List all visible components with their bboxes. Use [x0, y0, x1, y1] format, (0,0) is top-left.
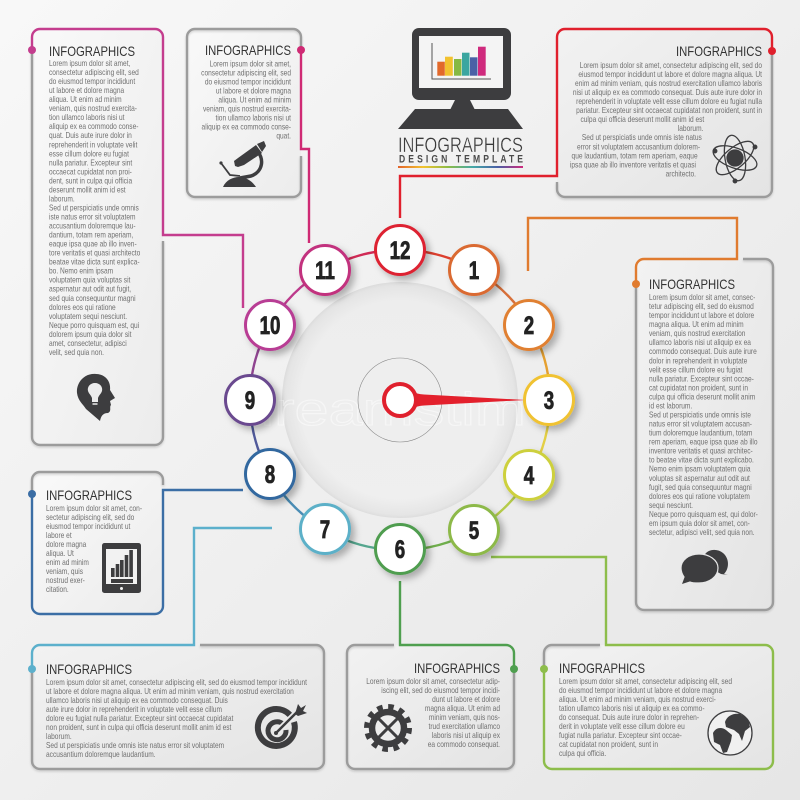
marker dot: [297, 46, 305, 54]
node 10: [246, 300, 294, 350]
text block: culpa qui officia.: [559, 748, 606, 758]
text block: ullamco laboris nisi ut aliquip ex ea commodo consequat. Duis: [46, 695, 228, 705]
text block: aute irure dolor in reprehenderit in voluptate velit esse cillum: [46, 704, 222, 714]
text block: enim ad minim: [46, 557, 89, 567]
node 7: [300, 504, 350, 554]
text block: id est laborum.: [649, 401, 692, 411]
text block: em ipsum quia dolor sit amet, con-: [649, 518, 750, 528]
text block: dolore magna: [46, 539, 87, 549]
text block: aspernatur aut odit aut fugit,: [49, 284, 131, 294]
node 8: 8: [265, 460, 275, 489]
heading: INFOGRAPHICS: [49, 43, 135, 59]
node 1: 1: [469, 256, 479, 285]
text block: aliqua. Ut enim ad minim veniam, quis nostrud exerci-: [559, 694, 716, 704]
heading: INFOGRAPHICS: [559, 660, 645, 676]
chart bars: [437, 47, 486, 76]
title: INFOGRAPHICS: [398, 134, 523, 157]
heading: INFOGRAPHICS: [46, 487, 132, 503]
text block: aliqua. Ut enim ad minim: [49, 94, 122, 104]
watermark: dreamstime: [240, 383, 560, 435]
text block: tium doloremque laudantium, totam: [649, 428, 752, 438]
text block: do eiusmod tempor incididunt: [205, 77, 291, 87]
icon: tablet with bars: [102, 543, 141, 593]
text block: dolore eu fugiat nulla pariatur. Excepteur sint occaecat cupidatat: [46, 713, 233, 723]
text block: ea commodo consequat.: [428, 739, 500, 749]
text block: cat cupidatat non proident, sunt in: [559, 739, 658, 749]
text block: laborum.: [46, 731, 72, 741]
text block: do eiusmod tempor incididunt ut labore et dolore magna: [559, 685, 723, 695]
text block: quat. Duis aute irure dolor in: [49, 131, 132, 140]
panel: left middle (blue): [28, 472, 243, 614]
text block: veniam, quis nostrud exercita-: [49, 104, 137, 113]
text block: fugit, sed quia consequuntur magni: [649, 482, 752, 492]
connector: orange line to circle 2: [528, 218, 737, 284]
text block: to beatae vitae dicta sunt explicabo.: [649, 455, 754, 465]
text block: que laudantium, totam rem aperiam, eaque: [572, 151, 698, 160]
text block: veniam, quis: [46, 566, 83, 576]
text block: tion ullamco laboris nisi ut: [215, 113, 291, 123]
text block: eiusmod tempor incididunt ut labore et dolore magna aliqua. Ut: [578, 69, 762, 79]
icon: microscope: [219, 141, 266, 187]
text block: inventore veritatis et quasi architec-: [649, 446, 753, 456]
node 9: [226, 376, 274, 424]
text block: sequi nesciunt.: [649, 500, 693, 510]
text block: commodo consequat. Duis aute irure: [649, 347, 757, 356]
marker dot: [768, 47, 776, 55]
icon: target with arrow: [258, 704, 307, 746]
text block: iste natus error sit voluptatem: [49, 212, 136, 222]
text block: beatae vitae dicta sunt explica-: [49, 257, 140, 267]
text block: dent, sunt in culpa qui officia: [49, 176, 133, 186]
node 12: 12: [390, 236, 410, 265]
text block: fugiat nulla pariatur. Excepteur sint occae-: [559, 730, 682, 740]
text block: do eiusmod tempor incididunt: [49, 76, 135, 86]
pointer: [412, 391, 526, 409]
node 10: 10: [260, 311, 280, 340]
text block: ut labore et dolore magna: [49, 85, 125, 95]
text block: veniam, quis nostrud exercitation: [649, 329, 745, 338]
icon: computer monitor with bar chart: [398, 28, 523, 129]
panel: bottom right (lime): [491, 557, 773, 769]
marker dot: [632, 280, 640, 288]
text block: Sed ut perspiciatis unde omnis: [49, 203, 139, 213]
panel: right (orange): [528, 218, 773, 610]
node 6: 6: [395, 535, 405, 564]
text block: laboris nisi ut aliquip ex: [432, 730, 500, 740]
clock dial: [226, 226, 574, 574]
text block: magna aliqua. Ut enim ad minim: [649, 319, 744, 329]
heading: INFOGRAPHICS: [414, 660, 500, 676]
heading: INFOGRAPHICS: [649, 276, 735, 292]
marker dot: [510, 665, 518, 673]
node 9: 9: [245, 386, 255, 415]
text block: ut labore et dolore magna: [216, 86, 292, 96]
text block: esse cillum dolore eu fugiat: [49, 149, 129, 158]
node 5: [450, 506, 498, 554]
text block: culpa qui officia deserunt mollit anim: [649, 392, 755, 402]
text block: do consequat. Duis aute irure dolor in reprehen-: [559, 712, 700, 722]
text block: amet, consectetur, adipisci: [49, 338, 127, 348]
text block: cat cupidatat non proident, sunt in: [649, 383, 748, 393]
text block: reprehenderit in voluptate velit esse cillum dolore eu fugiat nulla: [576, 96, 763, 106]
chart axes: [432, 43, 491, 79]
node 2: [504, 300, 554, 350]
text block: voluptas sit aspernatur aut odit aut: [649, 473, 750, 483]
text block: dantium, totam rem aperiam,: [49, 230, 133, 240]
text block: Neque porro quisquam est, qui dolor-: [649, 509, 758, 519]
panel: bottom left (light blue): [28, 528, 324, 769]
hub: [384, 384, 416, 416]
text block: nostrud exer-: [46, 575, 85, 585]
text block: natus error sit voluptatem accusan-: [649, 419, 753, 429]
ring connectors: [250, 250, 550, 550]
text block: iscing elit, sed do eiusmod tempor incidi-: [381, 685, 501, 695]
text block: magna aliqua. Ut enim ad: [425, 703, 500, 713]
text block: Lorem ipsum dolor sit amet,: [210, 59, 291, 69]
text block: voluptatem sequi nesciunt.: [49, 311, 127, 321]
text block: quat.: [276, 131, 291, 141]
text block: aliqua. Ut enim ad minim: [218, 95, 291, 105]
center disc: [282, 282, 518, 518]
connector: green line to circle 6: [400, 581, 514, 669]
text block: labore et: [46, 530, 72, 540]
text block: deserunt mollit anim id est: [49, 185, 126, 195]
node 11: [300, 246, 350, 294]
subtitle: DESIGN TEMPLATE: [399, 154, 523, 166]
text block: culpa qui officia deserunt mollit anim id est: [580, 115, 704, 124]
icon: head with light bulb: [77, 374, 115, 421]
text block: occaecat cupidatat non proi-: [49, 167, 132, 177]
text block: reprehenderit in voluptate velit: [49, 140, 137, 149]
text block: tempor incididunt ut labore et dolore: [649, 310, 754, 320]
node 6: [376, 524, 424, 574]
text block: Lorem ipsum dolor sit amet, con-: [46, 503, 143, 513]
text block: dolor in reprehenderit in voluptate: [649, 356, 747, 365]
text block: velit esse cillum dolore eu fugiat: [649, 365, 742, 375]
panel: top middle (magenta): [187, 29, 309, 243]
connector: lime line to circle 5: [491, 557, 773, 769]
text block: Lorem ipsum dolor sit amet, consectetur adipiscing elit, sed do: [580, 60, 762, 70]
marker dot: [28, 490, 36, 498]
icon: gear: [366, 706, 410, 750]
node 7: 7: [320, 515, 330, 544]
text block: ut labore et dolore magna aliqua. Ut enim ad minim veniam, quis nostrud exercitation: [46, 686, 294, 696]
text block: laborum.: [678, 124, 703, 133]
title: [398, 134, 523, 168]
node 4: [504, 450, 554, 500]
text block: voluptatem quia voluptas sit: [49, 275, 130, 285]
text block: trud exercitation ullamco: [429, 721, 500, 731]
connector: blue line to circle 8: [32, 490, 243, 614]
node 4: 4: [524, 461, 535, 490]
heading: INFOGRAPHICS: [205, 42, 291, 58]
text block: non proident, sunt in culpa qui officia deserunt mollit anim id est: [46, 722, 231, 732]
text block: citation.: [46, 584, 69, 594]
text block: consectetur adipiscing elit, sed: [201, 68, 291, 78]
text block: Lorem ipsum dolor sit amet, consec-: [649, 292, 756, 302]
node 12: [376, 226, 424, 274]
text block: architecto.: [666, 169, 696, 179]
text block: dolorem ipsum quia dolor sit: [49, 329, 131, 339]
text block: accusantium doloremque laudantium.: [46, 749, 156, 759]
text block: laborum.: [49, 194, 75, 204]
text block: Nemo enim ipsam voluptatem quia: [649, 464, 751, 474]
connector: red line to circle 12: [400, 29, 772, 218]
text block: error sit voluptatem accusantium dolorem-: [577, 142, 701, 151]
text block: aliquip ex ea commodo conse-: [49, 122, 139, 131]
text block: dolores eos qui ratione voluptatem: [649, 491, 750, 501]
text block: eaque ipsa quae ab illo inven-: [49, 239, 137, 249]
node 2: 2: [524, 311, 534, 340]
text block: sectetur, adipisci velit, sed quia non.: [649, 527, 755, 537]
icon: atom: [710, 134, 760, 183]
text block: tetur adipiscing elit, sed do eiusmod: [649, 301, 754, 311]
text block: veniam, quis nostrud exercita-: [203, 104, 291, 114]
marker dot: [28, 46, 36, 54]
text block: tore veritatis et quasi architecto: [49, 248, 140, 258]
connector: pink line to circle 10: [32, 29, 243, 308]
marker dot: [540, 665, 548, 673]
panel: bottom middle (green): [347, 581, 518, 769]
panel: top left (pink): [28, 29, 243, 445]
text block: Sed ut perspiciatis unde omnis iste natus: [582, 133, 702, 142]
heading: INFOGRAPHICS: [46, 661, 132, 677]
text block: nisi ut aliquip ex ea commodo consequat. Duis aute irure dolor in: [573, 87, 762, 97]
text block: sectetur adipiscing elit, sed do: [46, 512, 134, 522]
panel: top right (red): [400, 29, 776, 218]
text block: minim veniam, quis nos-: [429, 712, 500, 722]
text block: dolores eos qui ratione: [49, 302, 116, 312]
text block: Lorem ipsum dolor sit amet, consectetur adipiscing elit, sed: [559, 676, 732, 686]
node 8: [246, 450, 294, 498]
text block: velit, sed quia non.: [49, 347, 104, 357]
icon: chat bubbles: [681, 550, 728, 585]
heading: INFOGRAPHICS: [676, 43, 762, 59]
text block: dunt ut labore et dolore: [432, 694, 500, 704]
text block: Neque porro quisquam est, qui: [49, 320, 140, 330]
text block: eiusmod tempor incididunt ut: [46, 521, 130, 531]
text block: consectetur adipiscing elit, sed: [49, 67, 139, 77]
node 3: 3: [544, 386, 554, 415]
text block: aliquip ex ea commodo conse-: [202, 122, 291, 132]
marker dot: [28, 665, 36, 673]
text block: Lorem ipsum dolor sit amet, consectetur adip-: [366, 676, 500, 686]
inner ring: [358, 358, 442, 442]
connector: light blue line to circle 7: [32, 528, 272, 669]
text block: enim ad minim veniam, quis nostrud exercitation ullamco laboris: [575, 78, 762, 88]
text block: derit in voluptate velit esse cillum dolore eu: [559, 721, 685, 731]
icon: globe: [708, 711, 752, 755]
node 11: 11: [315, 256, 335, 285]
node 1: [450, 246, 498, 294]
text block: sed quia consequuntur magni: [49, 293, 136, 303]
text block: Lorem ipsum dolor sit amet,: [49, 58, 130, 68]
text block: rem aperiam, eaque ipsa quae ab illo: [649, 437, 758, 447]
text block: accusantium doloremque lau-: [49, 221, 136, 231]
text block: pariatur. Excepteur sint occaecat cupidatat non proident, sunt in: [576, 106, 762, 115]
text block: nulla pariatur. Excepteur sint occae-: [649, 374, 754, 384]
text block: Lorem ipsum dolor sit amet, consectetur adipiscing elit, sed do eiusmod tempor incididunt: [46, 677, 307, 687]
node 5: 5: [469, 516, 479, 545]
text block: bo. Nemo enim ipsam: [49, 266, 113, 276]
rainbow underline: [398, 166, 523, 168]
text block: tion ullamco laboris nisi ut: [49, 113, 125, 122]
connector: magenta line to circle 11: [301, 50, 309, 243]
text block: ullamco laboris nisi ut aliquip ex ea: [649, 338, 752, 347]
text block: nulla pariatur. Excepteur sint: [49, 158, 132, 168]
text block: Sed ut perspiciatis unde omnis iste natus error sit voluptatem: [46, 740, 224, 750]
text block: Sed ut perspiciatis unde omnis iste: [649, 410, 751, 420]
text block: ipsa quae ab illo inventore veritatis et quasi: [570, 160, 696, 170]
node 3: [524, 376, 574, 424]
text block: tation ullamco laboris nisi ut aliquip ex ea commo-: [559, 703, 705, 713]
text block: aliqua. Ut: [46, 548, 74, 558]
